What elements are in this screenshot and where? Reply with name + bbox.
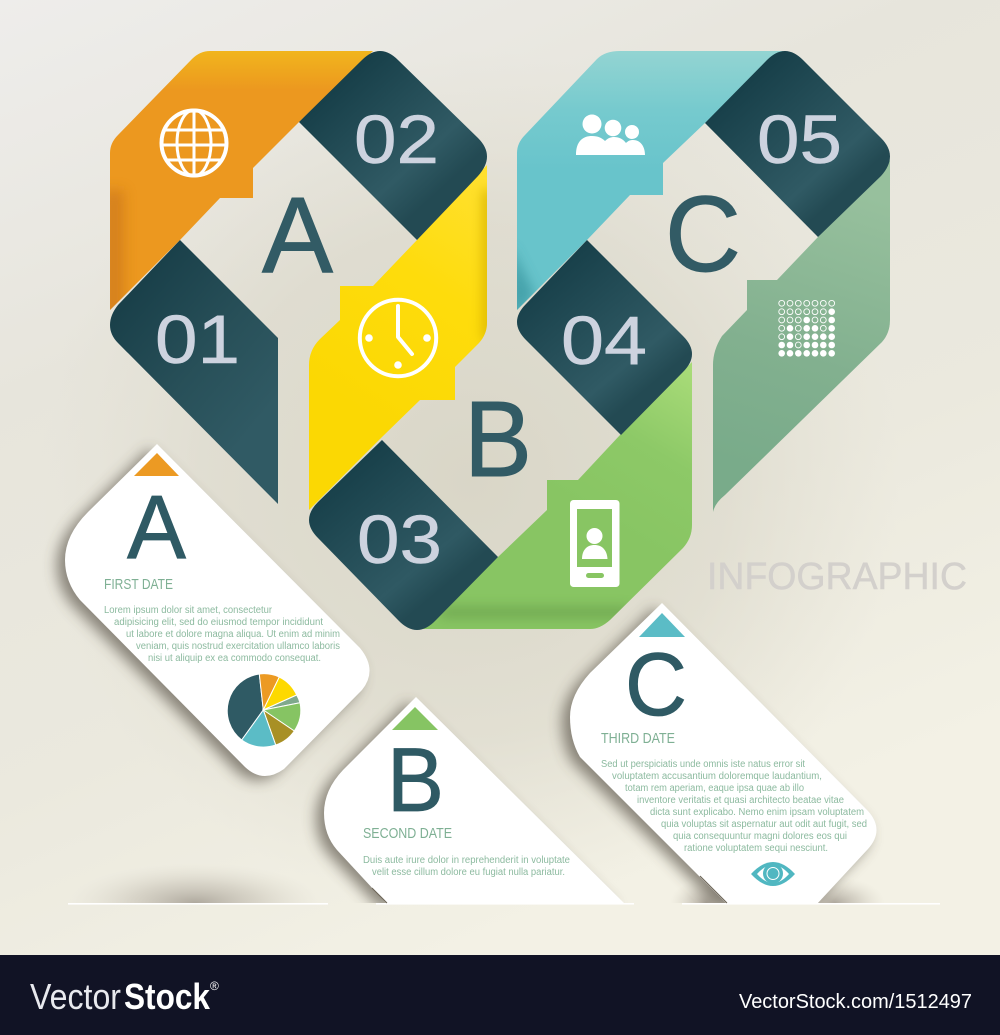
panel: card A [57, 444, 370, 780]
triangle marker A [134, 453, 179, 476]
footer bar [0, 955, 1000, 1035]
big letter B: B [464, 378, 532, 499]
triangle marker B [392, 707, 438, 730]
icon: smartphone [570, 500, 620, 587]
dark tile 02 [299, 51, 487, 240]
body text A: ut labore et dolore magna aliqua. Ut enim ad minim [126, 629, 340, 640]
body text A: nisi ut aliquip ex ea commodo consequat. [148, 653, 321, 664]
body text C: quia consequuntur magni dolores eos qui [673, 831, 847, 842]
number 05: 05 [757, 101, 842, 178]
body text B: Duis aute irure dolor in reprehenderit in voluptate [363, 855, 570, 866]
ground shadow left [68, 863, 322, 903]
footer logo: Stock [124, 976, 211, 1017]
triangle marker C [639, 613, 685, 637]
icon: dot matrix [778, 300, 835, 357]
footer logo: Vector [30, 976, 121, 1017]
icon: clock [360, 300, 436, 376]
ground lines [68, 903, 940, 905]
body text C: voluptatem accusantium doloremque laudantium, [612, 771, 822, 782]
ribbon A: yellow band [309, 165, 493, 510]
number 01: 01 [155, 301, 240, 378]
body text A [104, 605, 340, 664]
number 02: 02 [354, 101, 439, 178]
ribbon C: sage band [713, 160, 890, 512]
label: third date: THIRD DATE [601, 730, 675, 747]
ribbon A: orange band [104, 51, 373, 325]
body text C [601, 759, 867, 854]
dark tile 01 [110, 240, 278, 504]
body text C: totam rem aperiam, eaque ipsa quae ab illo [625, 783, 804, 794]
dark tile 03 [309, 440, 498, 630]
number 04: 04 [561, 302, 647, 379]
body text C: inventore veritatis et quasi architecto beatae vitae [637, 795, 844, 806]
ribbon C: teal band [510, 51, 783, 325]
panel: card B [316, 697, 625, 908]
body text C: ratione voluptatem sequi nesciunt. [684, 843, 828, 854]
dark tile 05 [705, 51, 890, 237]
label: first date: FIRST DATE [104, 576, 173, 593]
label: second date: SECOND DATE [363, 825, 452, 842]
big letter C: C [665, 173, 741, 294]
icon: people [576, 114, 645, 155]
body text A: Lorem ipsum dolor sit amet, consectetur [104, 605, 273, 616]
panel: card C [562, 603, 876, 908]
number 03: 03 [357, 501, 442, 578]
ground shadows right [670, 877, 885, 903]
dark tile 04 [517, 240, 692, 435]
body text B: velit esse cillum dolore eu fugiat nulla pariatur. [372, 867, 565, 878]
ribbon B: green band [420, 362, 692, 629]
big letter A: A [262, 174, 333, 295]
body text B [363, 855, 570, 878]
pie chart [227, 674, 301, 747]
body text C: quia voluptas sit aspernatur aut odit aut fugit, sed [661, 819, 867, 830]
body text A: adipisicing elit, sed do eiusmod tempor incididunt [114, 617, 323, 628]
card letter B: B [387, 730, 444, 831]
body text C: Sed ut perspiciatis unde omnis iste natus error sit [601, 759, 805, 770]
icon: globe [162, 110, 226, 176]
icon: eye [751, 862, 795, 886]
card letter A: A [127, 478, 186, 578]
body text C: dicta sunt explicabo. Nemo enim ipsam voluptatem [650, 807, 864, 818]
registered mark: ® [210, 979, 219, 993]
infographic wordmark: INFOGRAPHIC [707, 556, 967, 598]
body text A: veniam, quis nostrud exercitation ullamco laboris [136, 641, 340, 652]
footer image id: VectorStock.com/1512497 [739, 991, 972, 1013]
card letter C: C [625, 634, 687, 734]
